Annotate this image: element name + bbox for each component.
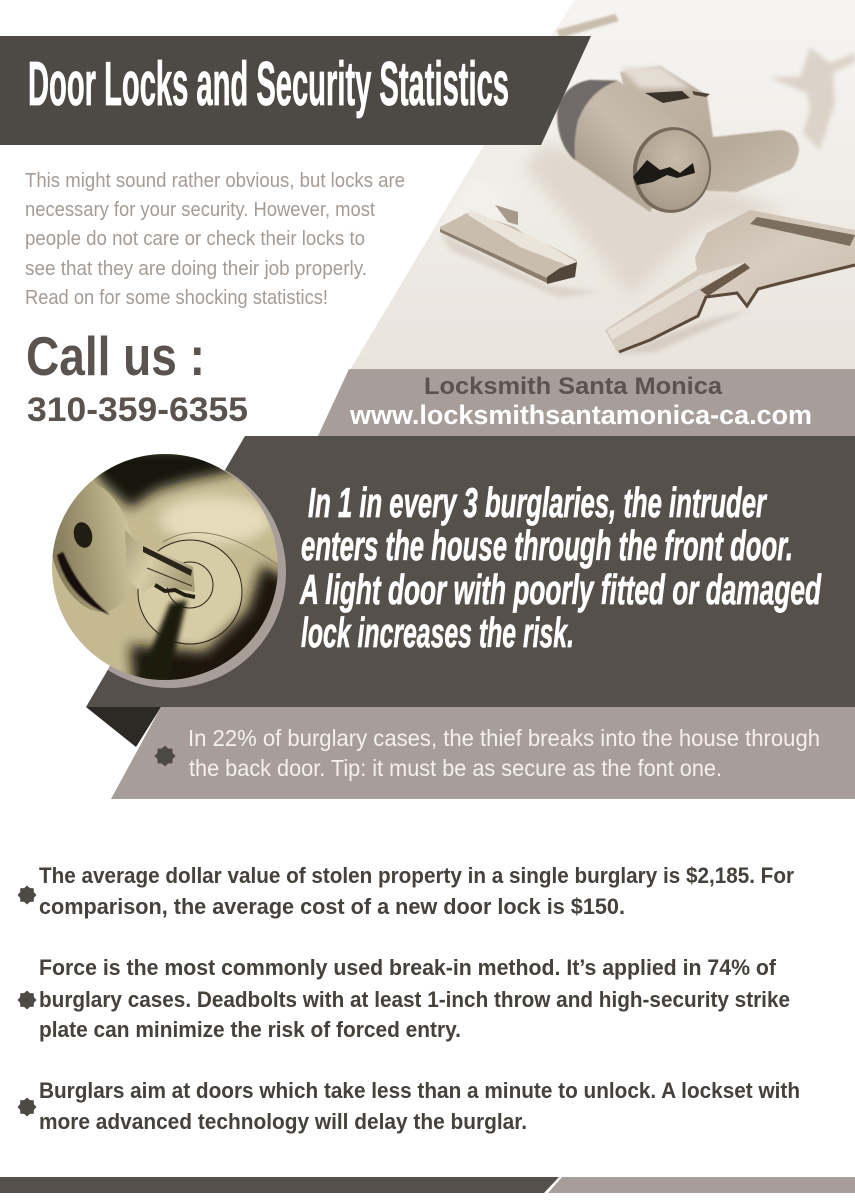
stat: time to unlock: Burglars aim at doors which take less than a minute to unlock. A lockset with [39, 1078, 800, 1103]
dark panel: front door statistic [54, 436, 855, 707]
title banner [0, 36, 591, 145]
key hole [74, 522, 92, 548]
back door text: the back door. Tip: it must be as secure as the font one. [189, 755, 722, 781]
stat: time to unlock: more advanced technology will delay the burglar. [39, 1109, 527, 1134]
intro paragraph [25, 170, 405, 309]
key blade [125, 530, 195, 593]
company name: Locksmith Santa Monica [424, 373, 723, 400]
intro paragraph: people do not care or check their locks to [25, 228, 365, 250]
lock rings [138, 540, 242, 644]
circular photo: key in lock [52, 454, 278, 680]
blurred small key at top [557, 14, 619, 38]
dark shadow upper [92, 454, 237, 515]
stat: forced entry: burglary cases. Deadbolts with at least 1-inch throw and high-security strike [39, 987, 790, 1012]
front door text [299, 479, 822, 656]
key crescent shadow [57, 552, 110, 615]
right key [605, 210, 855, 355]
lock cylinder [556, 79, 653, 212]
dark shadow lower right [130, 565, 290, 695]
website band [318, 369, 855, 436]
key bow [52, 482, 132, 612]
lock plate [620, 66, 799, 192]
grey band: back door statistic [86, 707, 855, 799]
front door text: lock increases the risk. [301, 609, 574, 656]
stat: stolen property value [18, 863, 794, 919]
blurred key at top right [768, 47, 855, 150]
footer band [0, 1177, 855, 1193]
back door text: In 22% of burglary cases, the thief breaks into the house through [188, 725, 820, 751]
intro paragraph: see that they are doing their job properly. [25, 258, 367, 280]
shadow under lock [523, 143, 790, 297]
stat: stolen property value: comparison, the average cost of a new door lock is $150. [39, 894, 625, 919]
photo: lock cylinder and keys [340, 0, 855, 370]
lock face with key slot [632, 127, 712, 213]
intro paragraph: This might sound rather obvious, but locks are [25, 170, 405, 192]
bullet [154, 746, 176, 766]
stat: forced entry [18, 955, 790, 1042]
stat: forced entry: plate can minimize the risk of forced entry. [39, 1017, 461, 1042]
bright upper right glow [160, 496, 270, 544]
intro paragraph: Read on for some shocking statistics! [25, 287, 328, 309]
intro paragraph: necessary for your security. However, most [25, 199, 375, 221]
call us heading: Call us : [26, 325, 205, 387]
stat: forced entry: Force is the most commonly used break-in method. It’s applied in 74% of [39, 955, 777, 980]
back door text [188, 725, 820, 781]
phone number: 310-359-6355 [27, 391, 248, 429]
website: www.locksmithsantamonica-ca.com [349, 400, 812, 430]
stat: time to unlock [18, 1078, 800, 1134]
left key [440, 205, 592, 298]
stat: stolen property value: The average dollar value of stolen property in a single burglary is $2,185. For [39, 863, 794, 888]
key shadow stripe [138, 600, 187, 682]
